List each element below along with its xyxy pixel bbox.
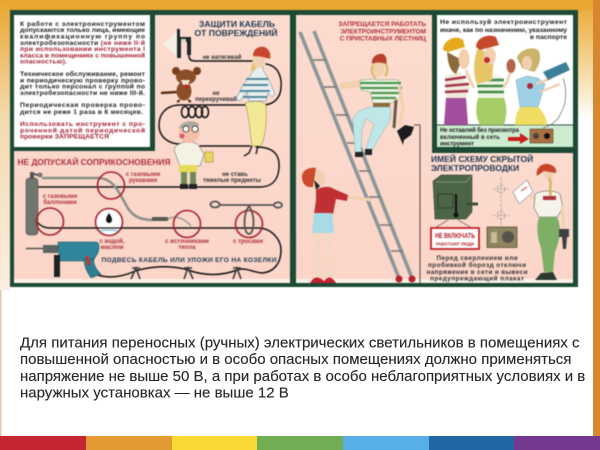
text: before drilling: Перед сверлением или [436,255,518,262]
panel: use as per passport: в паспорте [530,34,567,41]
rainbow footer bar [0,436,600,450]
label: do not leave heavy objects: не ставь [222,172,248,178]
icon: socket block [530,129,553,143]
icon: wall socket [487,227,517,248]
label: with gas hoses: рукавами [129,178,157,184]
sign: do not switch on: НЕ ВКЛЮЧАТЬ [435,233,475,240]
text: before drilling: пробивкой борозд отключи [428,261,526,269]
illustration: woman holding ladder [302,168,372,283]
label: with ropes: с тросами [233,239,263,245]
label: with gas cylinders [43,194,77,206]
heading: hang the cable: ПОДВЕСЬ КАБЕЛЬ ИЛИ УЛОЖИ ЕГО НА КОЗЕЛКИ [102,257,277,264]
illustration: woman in helmet [236,47,275,156]
illustration: rope sling [210,202,282,234]
icon: cable stands [131,268,241,279]
panel: admission rules: и периодическую проверку прово- [20,78,145,84]
panel: admission rules: проверки ЗАПРЕЩАЕТСЯ [20,134,109,140]
icon: electrical switch box [433,175,478,228]
label: with water and oil: маслом [101,245,124,251]
sign: do not switch on [431,228,479,249]
warning: do not leave unattended: Не оставляй без присмотра [440,127,520,134]
icon: wall plug and arrow [163,29,191,58]
icon: jigsaw [397,125,414,145]
label: do not pull: не натягивай [203,54,242,61]
heading: protect cable: ЗАЩИТИ КАБЕЛЬ [199,19,275,29]
label: do not twist: не [213,91,220,97]
warning: do not leave unattended: инструмент [440,142,474,148]
illustration: woman with drill [515,48,570,128]
sign: do not switch on: РАБОТАЮТ ЛЮДИ [436,242,474,246]
panel: admission rules: Техническое обслуживание, ремонт [20,70,146,78]
text: voltage requirement: повышенной опасностью и в особо опасных помещениях должно применяться [20,351,571,368]
panel: hidden wiring scheme [432,153,573,283]
text: voltage requirement: наружных установках — не выше 12 В [20,384,289,402]
heading: from damage: ОТ ПОВРЕЖДЕНИЙ [194,27,278,38]
text: before drilling: напряжение в сети и вывеси [426,269,528,276]
label: do not leave heavy objects: тяжелые предметы [203,178,261,184]
illustration: drill cord [414,125,420,283]
heading: ladder ban: С ПРИСТАВНЫХ ЛЕСТНИЦ [340,36,426,42]
illustration: rat [161,67,201,102]
label: with gas hoses [126,172,160,184]
text: voltage requirement: Для питания переносных (ручных) электрических светильников в помещениях с [20,334,580,352]
heading: do not allow contact: НЕ ДОПУСКАЙ СОПРИКОСНОВЕНИЯ [18,156,171,167]
illustration: ladder [300,31,416,282]
panel: admission rules: дится не реже 1 раза в 6 месяцев. [20,109,143,116]
text: voltage requirement [20,334,585,402]
heading: ladder ban: ЭЛЕКТРОИНСТРУМЕНТОМ [340,28,426,36]
heading: ladder ban: ЗАПРЕЩАЕТСЯ РАБОТАТЬ [338,21,426,28]
panel: use as per passport: Не используй электроинструмент [440,18,568,26]
illustration: woman with red helmet and mirror [474,36,516,125]
label: do not twist: перекручивай [195,96,237,103]
illustration: woman with plan and drill [513,164,569,280]
label: with heat sources [165,239,209,251]
panel: admission rules: опасностью). [20,58,67,66]
heading: hidden wiring scheme: ИМЕЙ СХЕМУ СКРЫТОЙ [431,153,533,164]
illustration: electric drill [26,242,101,278]
panel: admission rules: Использовать инструмент с про- [20,121,145,128]
icon: wiring scheme crosshairs [493,177,509,226]
illustration: woman climbing ladder [340,54,403,157]
label: with heat sources: с источниками [165,239,209,245]
heading: hidden wiring scheme [431,153,533,173]
illustration: gas hose and torch [42,178,191,226]
warning: do not leave unattended [440,127,553,148]
panel: admission rules [14,15,150,147]
panel: admission rules: роченной датой периодической [20,126,145,134]
text: before drilling: предупреждающий плакат [430,274,524,282]
panel: admission rules: класса в помещениях с повышенной [20,52,145,60]
label: with water and oil: с водой, [99,238,125,245]
panel: admission rules: квалификационную группу по [20,34,145,40]
panel: ladder ban [296,15,432,283]
label: do not leave heavy objects [203,172,261,184]
panel: admission rules: дит только персонал с группой по [20,82,145,90]
text: before drilling [426,255,528,282]
warning: do not leave unattended: включенный в сеть [440,134,500,141]
label: with gas cylinders: баллонами [43,199,77,206]
icon: gas cylinders [26,172,42,235]
cable route [28,44,281,277]
panel: admission rules: К работе с электроинструментом [20,20,145,28]
panel: admission rules: электробезопасности не ниже III-й. [20,89,145,97]
contact circles [36,172,262,238]
illustration: woman with yellow helmet [443,38,474,125]
panel: admission rules: электробезопасности (не ниже II-й [20,39,145,47]
cable coil [182,106,208,118]
panel: use as per passport: иначе, как по назначению, указанному [440,27,567,34]
panel: admission rules: при использовании инструмента I [20,46,145,53]
heading: ladder ban [338,21,426,42]
label: with gas hoses: с газовыми [126,172,160,178]
label: with water and oil [99,238,125,251]
label: do not twist [195,91,237,103]
illustration: man with glasses and beer [174,121,213,189]
panel: admission rules: допускаются только лица, имеющие [20,27,145,34]
poster frame [10,10,578,287]
panel: use as per passport [437,15,573,147]
text: voltage requirement: напряжение не выше 50 В, а при работах в особо неблагоприятных условиях и в [20,368,585,385]
panel: admission rules: Периодическая проверка прово- [20,102,145,109]
icon: red arrow [508,133,529,144]
heading: hidden wiring scheme: ЭЛЕКТРОПРОВОДКИ [431,163,519,173]
label: with gas cylinders: с газовыми [43,194,77,200]
label: with heat sources: тепла [178,245,196,251]
panel: protect the cable [14,15,290,283]
icon: oil drop [96,213,122,231]
